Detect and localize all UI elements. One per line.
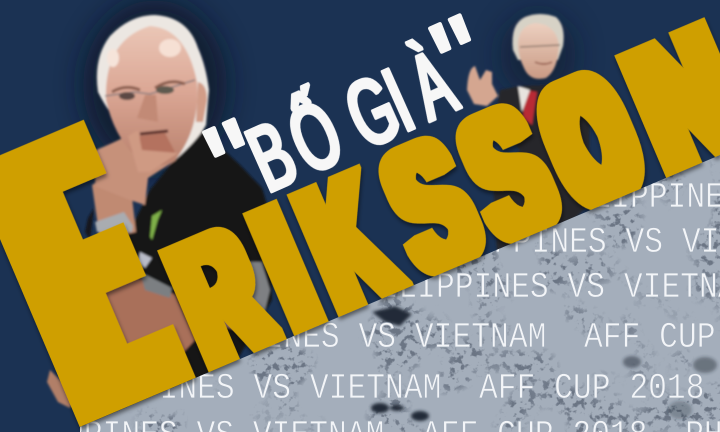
portrait: Eriksson clapping in a suit xyxy=(467,13,590,252)
repeated text lines PHILIPPINES VS VIETNAM AFF CUP 2018 xyxy=(80,182,720,432)
title: ERIKSSON: R xyxy=(147,191,293,401)
panel: gray textured lower right background xyxy=(80,155,720,432)
hair and skull xyxy=(97,15,209,166)
portrait: Eriksson with hand on chin xyxy=(47,0,272,408)
title: ERIKSSON: I xyxy=(232,165,339,369)
title: ERIKSSON: S xyxy=(437,68,579,280)
title: ERIKSSON: S xyxy=(360,101,503,313)
heading: "BỐ GIÀ": À xyxy=(396,30,469,139)
heading: "BỐ GIÀ" xyxy=(189,0,509,234)
heading: "BỐ GIÀ": BỐ GI xyxy=(234,51,427,212)
title: ERIKSSON: O xyxy=(519,37,663,244)
title: ERIKSSON: K xyxy=(274,130,421,351)
heading: "BỐ GIÀ": " xyxy=(189,94,283,234)
